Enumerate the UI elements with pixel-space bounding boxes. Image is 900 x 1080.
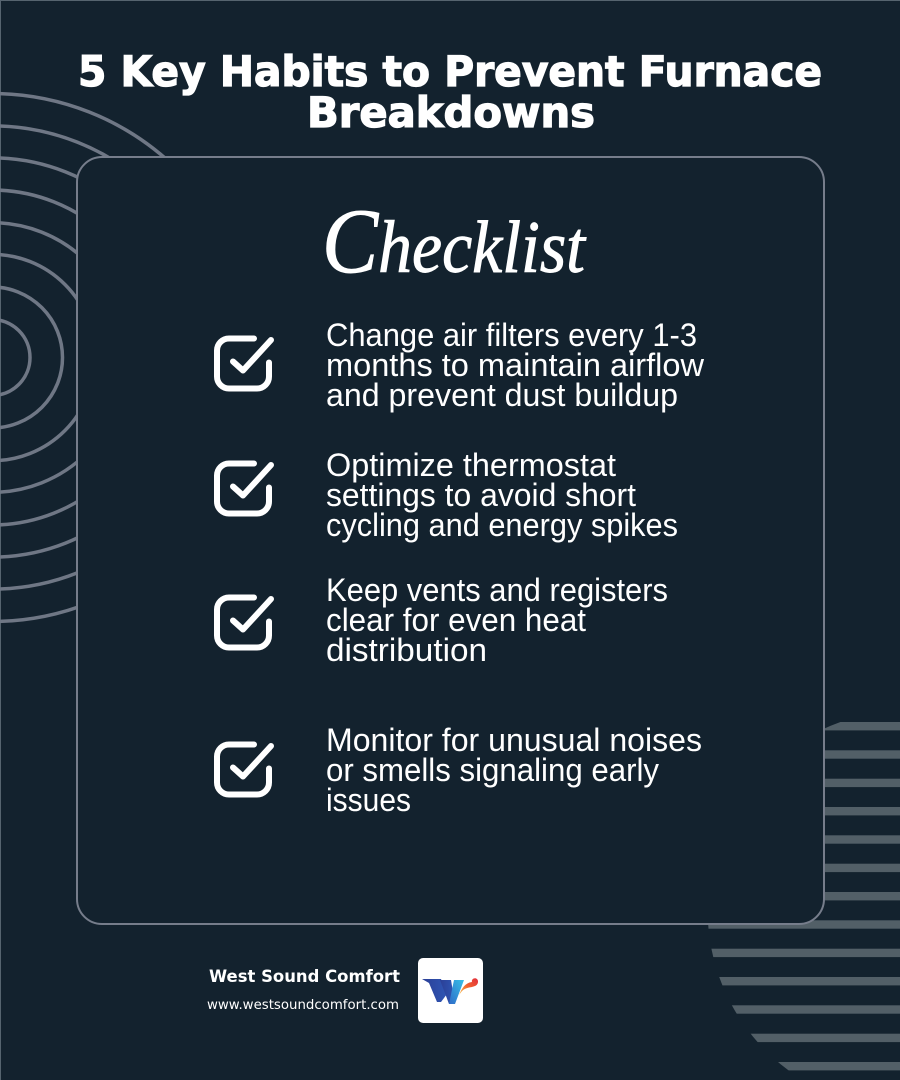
checklist item 2	[217, 447, 678, 543]
text: item 1	[326, 317, 705, 413]
heading: Checklist: Checklist	[322, 190, 587, 292]
text: item 2	[326, 447, 678, 543]
text: item 4	[326, 722, 702, 818]
text: item 4: or smells signaling early	[326, 752, 659, 788]
checklist item 3	[217, 572, 668, 668]
text: item 3: Keep vents and registers	[326, 572, 668, 608]
decorative concentric arcs	[0, 94, 256, 622]
checklist item 4	[217, 722, 702, 818]
text: item 4: issues	[326, 782, 411, 818]
decorative striped circle	[690, 722, 900, 1070]
title: 5 Key Habits to Prevent Furnace	[78, 47, 822, 96]
text: item 1: Change air filters every 1-3	[326, 317, 697, 353]
footer: company name and website: www.westsoundcomfort.com	[207, 998, 399, 1013]
text: item 3	[326, 572, 668, 668]
text: item 4: Monitor for unusual noises	[326, 722, 702, 758]
checklist item 1	[217, 317, 705, 413]
text: item 2: Optimize thermostat	[326, 447, 616, 483]
text: item 2: cycling and energy spikes	[326, 507, 678, 543]
icon: checkbox 4	[217, 744, 271, 794]
title	[78, 47, 822, 137]
icon: checkbox 2	[217, 464, 271, 514]
text: item 1: and prevent dust buildup	[326, 377, 678, 413]
footer: company name and website	[207, 967, 400, 1013]
text: item 2: settings to avoid short	[326, 477, 636, 513]
panel: checklist card	[77, 157, 824, 924]
text: item 3: clear for even heat	[326, 602, 586, 638]
icon: checkbox 3	[217, 598, 271, 648]
title: Breakdowns	[307, 88, 595, 137]
icon: company logo	[418, 958, 483, 1023]
text: item 3: distribution	[326, 632, 487, 668]
icon: checkbox 1	[217, 338, 271, 388]
footer: company name and website: West Sound Comfort	[209, 967, 400, 986]
text: item 1: months to maintain airflow	[326, 347, 705, 383]
